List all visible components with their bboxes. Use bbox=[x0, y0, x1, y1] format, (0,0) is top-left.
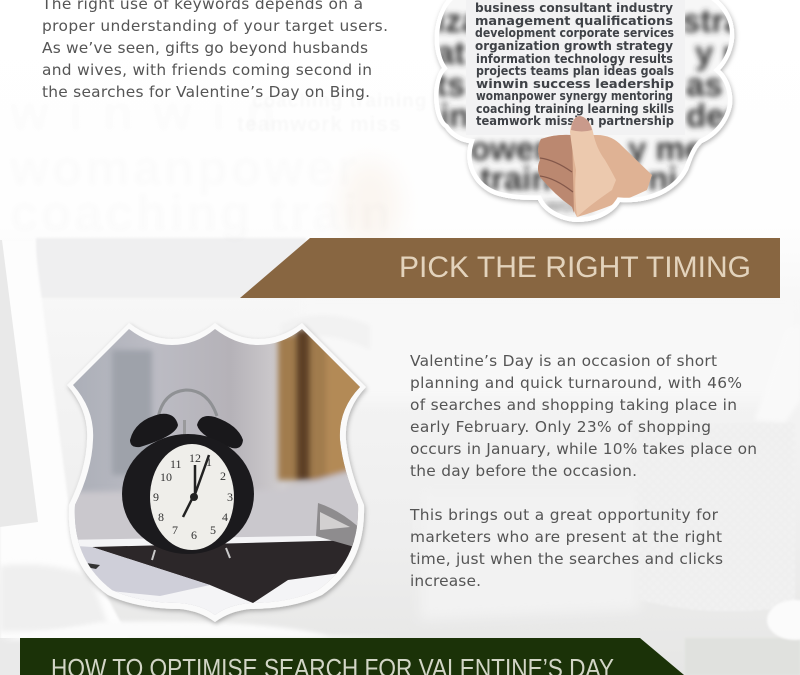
blurred word cloud: ower bbox=[470, 130, 547, 167]
blurred word cloud: train bbox=[480, 160, 552, 197]
flower badge photo: business consultant industry bbox=[475, 0, 673, 15]
desk, cup and pens bbox=[420, 490, 640, 620]
clock numerals: 9 bbox=[153, 490, 159, 504]
flower badge photo: womanpower synergy mentoring bbox=[476, 88, 673, 103]
flower badge photo: information technology results bbox=[476, 51, 673, 66]
blurred word cloud: as bbox=[686, 66, 723, 103]
page background: w i n w i n bbox=[9, 85, 279, 141]
blurred word cloud: in bbox=[440, 97, 469, 134]
heading banner: how to optimise search bbox=[20, 638, 684, 675]
heading banner: pick the right timing bbox=[240, 238, 780, 298]
badge base and shadow bbox=[434, 0, 734, 222]
clock numerals: 2 bbox=[220, 469, 226, 483]
blurred word cloud: work bbox=[544, 195, 593, 217]
clock numerals: 10 bbox=[160, 470, 172, 484]
clock numerals: 1 bbox=[206, 455, 212, 469]
body text block bbox=[409, 352, 757, 590]
page background: womanpower bbox=[9, 140, 359, 196]
paper with word cloud bbox=[466, 10, 685, 130]
body text block: marketers who are present at the right bbox=[410, 528, 722, 546]
flower badge photo: projects teams plan ideas goals bbox=[476, 63, 674, 78]
intro text block: and wives, with friends coming second in bbox=[42, 61, 372, 79]
blurred word cloud: y me bbox=[628, 130, 703, 167]
dark book and table bbox=[78, 536, 356, 615]
body text block: planning and quick turnaround, with 46% bbox=[410, 374, 742, 392]
body text block: the day before the occasion. bbox=[410, 462, 637, 480]
blurred word cloud: stra bbox=[682, 2, 743, 39]
flower badge photo: management qualifications bbox=[475, 13, 673, 28]
blurred word cloud: der bbox=[686, 97, 738, 134]
blurred word cloud: at bbox=[436, 34, 465, 71]
clock numerals bbox=[153, 451, 233, 542]
blurred word cloud: ts bbox=[436, 66, 465, 103]
intro text block: the searches for Valentine’s Day on Bing. bbox=[42, 83, 370, 101]
clock numerals: 4 bbox=[222, 510, 228, 524]
alarm clock bbox=[122, 390, 254, 560]
blurred word cloud bbox=[436, 2, 754, 217]
flower badge photo bbox=[430, 0, 754, 225]
flower badge photo: development corporate services bbox=[475, 25, 674, 40]
body text block: This brings out a great opportunity for bbox=[409, 506, 719, 524]
heading text: PICK THE RIGHT TIMING bbox=[399, 251, 751, 284]
hand bbox=[538, 116, 652, 217]
shield photo of alarm clock bbox=[60, 320, 370, 625]
clock numerals: 8 bbox=[158, 510, 164, 524]
flower badge photo: winwin success leadership bbox=[476, 76, 674, 91]
clock numerals: 6 bbox=[191, 528, 197, 542]
blurred word cloud: ni bbox=[648, 160, 677, 197]
shield white outline bbox=[67, 323, 366, 622]
flower badge photo: teamwork mission partnership bbox=[476, 113, 674, 128]
blurred word cloud: y re bbox=[695, 34, 754, 71]
clock numerals: 3 bbox=[227, 490, 233, 504]
body text block: occurs in January, while 10% takes place on bbox=[410, 440, 757, 458]
intro text block bbox=[41, 0, 388, 101]
intro text block: proper understanding of your target users. bbox=[42, 17, 388, 35]
page background: coaching training bbox=[252, 91, 427, 112]
glasses bbox=[316, 503, 357, 546]
body text block: of searches and shopping taking place in bbox=[410, 396, 737, 414]
page background: coaching train bbox=[10, 185, 394, 241]
body text block: early February. Only 23% of shopping bbox=[410, 418, 711, 436]
body text block: time, just when the searches and clicks bbox=[410, 550, 723, 568]
laptop bbox=[0, 240, 130, 640]
intro text block: As we’ve seen, gifts go beyond husbands bbox=[42, 39, 368, 57]
clock numerals: 12 bbox=[189, 451, 201, 465]
clock numerals: 11 bbox=[170, 457, 182, 471]
page background: teamwork miss bbox=[237, 113, 402, 136]
clock numerals: 5 bbox=[210, 523, 216, 537]
flower badge photo: coaching training learning skills bbox=[476, 101, 674, 116]
blurred word cloud: iza bbox=[436, 2, 481, 39]
badge white outline bbox=[434, 0, 734, 222]
body text block: Valentine’s Day is an occasion of short bbox=[410, 352, 717, 370]
body text block: increase. bbox=[410, 572, 481, 590]
clock numerals: 7 bbox=[172, 523, 178, 537]
flower badge photo: organization growth strategy bbox=[475, 38, 673, 53]
